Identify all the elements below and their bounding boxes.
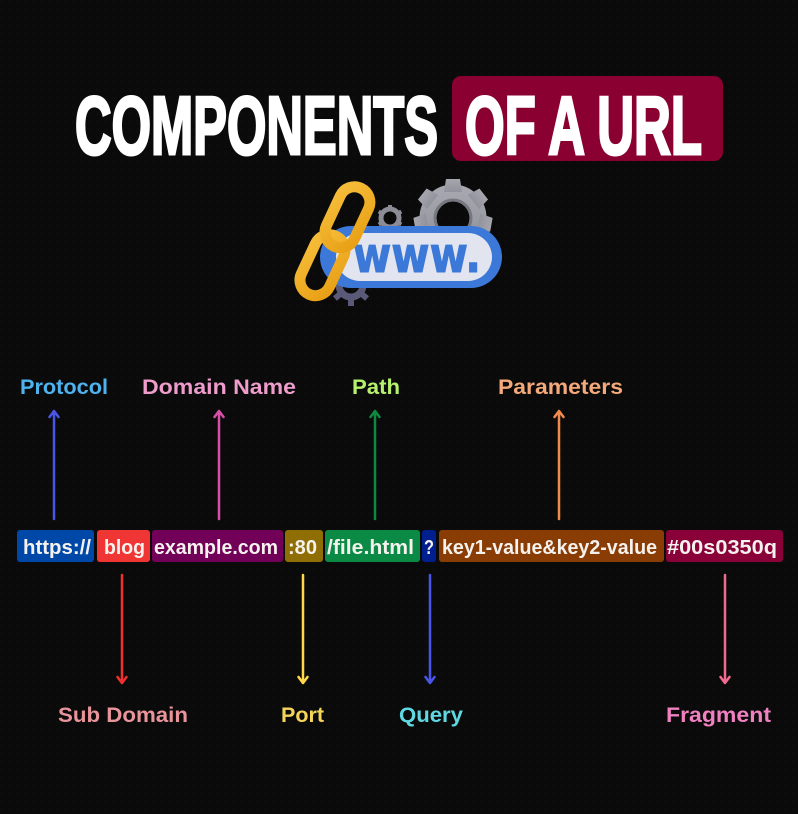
segment: file: /file.html	[327, 537, 414, 559]
icon: bottom gear	[330, 273, 372, 306]
label: path: Path	[352, 376, 400, 399]
label: parameters: Parameters	[498, 376, 623, 399]
top arrows	[50, 411, 564, 519]
arrow: parameters	[554, 411, 564, 519]
segment: query mark	[422, 530, 436, 562]
title: components: COMPONENTS	[75, 79, 438, 172]
title	[75, 76, 723, 172]
arrow: protocol	[50, 411, 58, 519]
arrow: port	[298, 575, 308, 683]
segment: file	[325, 530, 420, 562]
label: domain name: Domain Name	[142, 376, 296, 399]
segment: query mark: ?	[424, 537, 434, 559]
segment: blog: blog	[104, 537, 145, 559]
icon: www pill	[320, 226, 502, 288]
segment: fragment: #00s0350q	[667, 537, 777, 559]
bottom labels	[58, 704, 771, 727]
segment: fragment	[666, 530, 783, 562]
url bar	[17, 530, 783, 562]
icon: upper chain link	[320, 182, 375, 253]
arrow: fragment	[720, 575, 730, 683]
top labels	[20, 376, 623, 399]
segment: port	[285, 530, 323, 562]
label: query: Query	[399, 704, 463, 727]
label: protocol: Protocol	[20, 376, 108, 399]
segment: example.com: example.com	[154, 537, 278, 559]
arrow: sub domain	[118, 575, 126, 683]
icon: www text: www.	[353, 227, 481, 284]
segment: example.com	[152, 530, 283, 562]
label: port: Port	[281, 704, 324, 727]
segment: blog	[97, 530, 150, 562]
icon: www link and gears	[295, 179, 502, 306]
label: sub domain: Sub Domain	[58, 704, 188, 727]
icon: large gear	[413, 179, 493, 243]
arrow: query	[426, 575, 434, 683]
arrow: domain name	[214, 411, 224, 519]
bottom arrows	[118, 575, 730, 683]
arrow: path	[370, 411, 380, 519]
segment: parameters: key1-value&key2-value	[442, 537, 657, 559]
segment: https: https://	[23, 537, 91, 559]
title highlight pill	[452, 76, 723, 161]
label: fragment: Fragment	[666, 704, 771, 727]
icon: small gear	[378, 205, 402, 231]
segment: port: :80	[288, 537, 317, 559]
icon: lower chain link	[295, 230, 350, 301]
segment: https	[17, 530, 94, 562]
segment: parameters	[439, 530, 664, 562]
